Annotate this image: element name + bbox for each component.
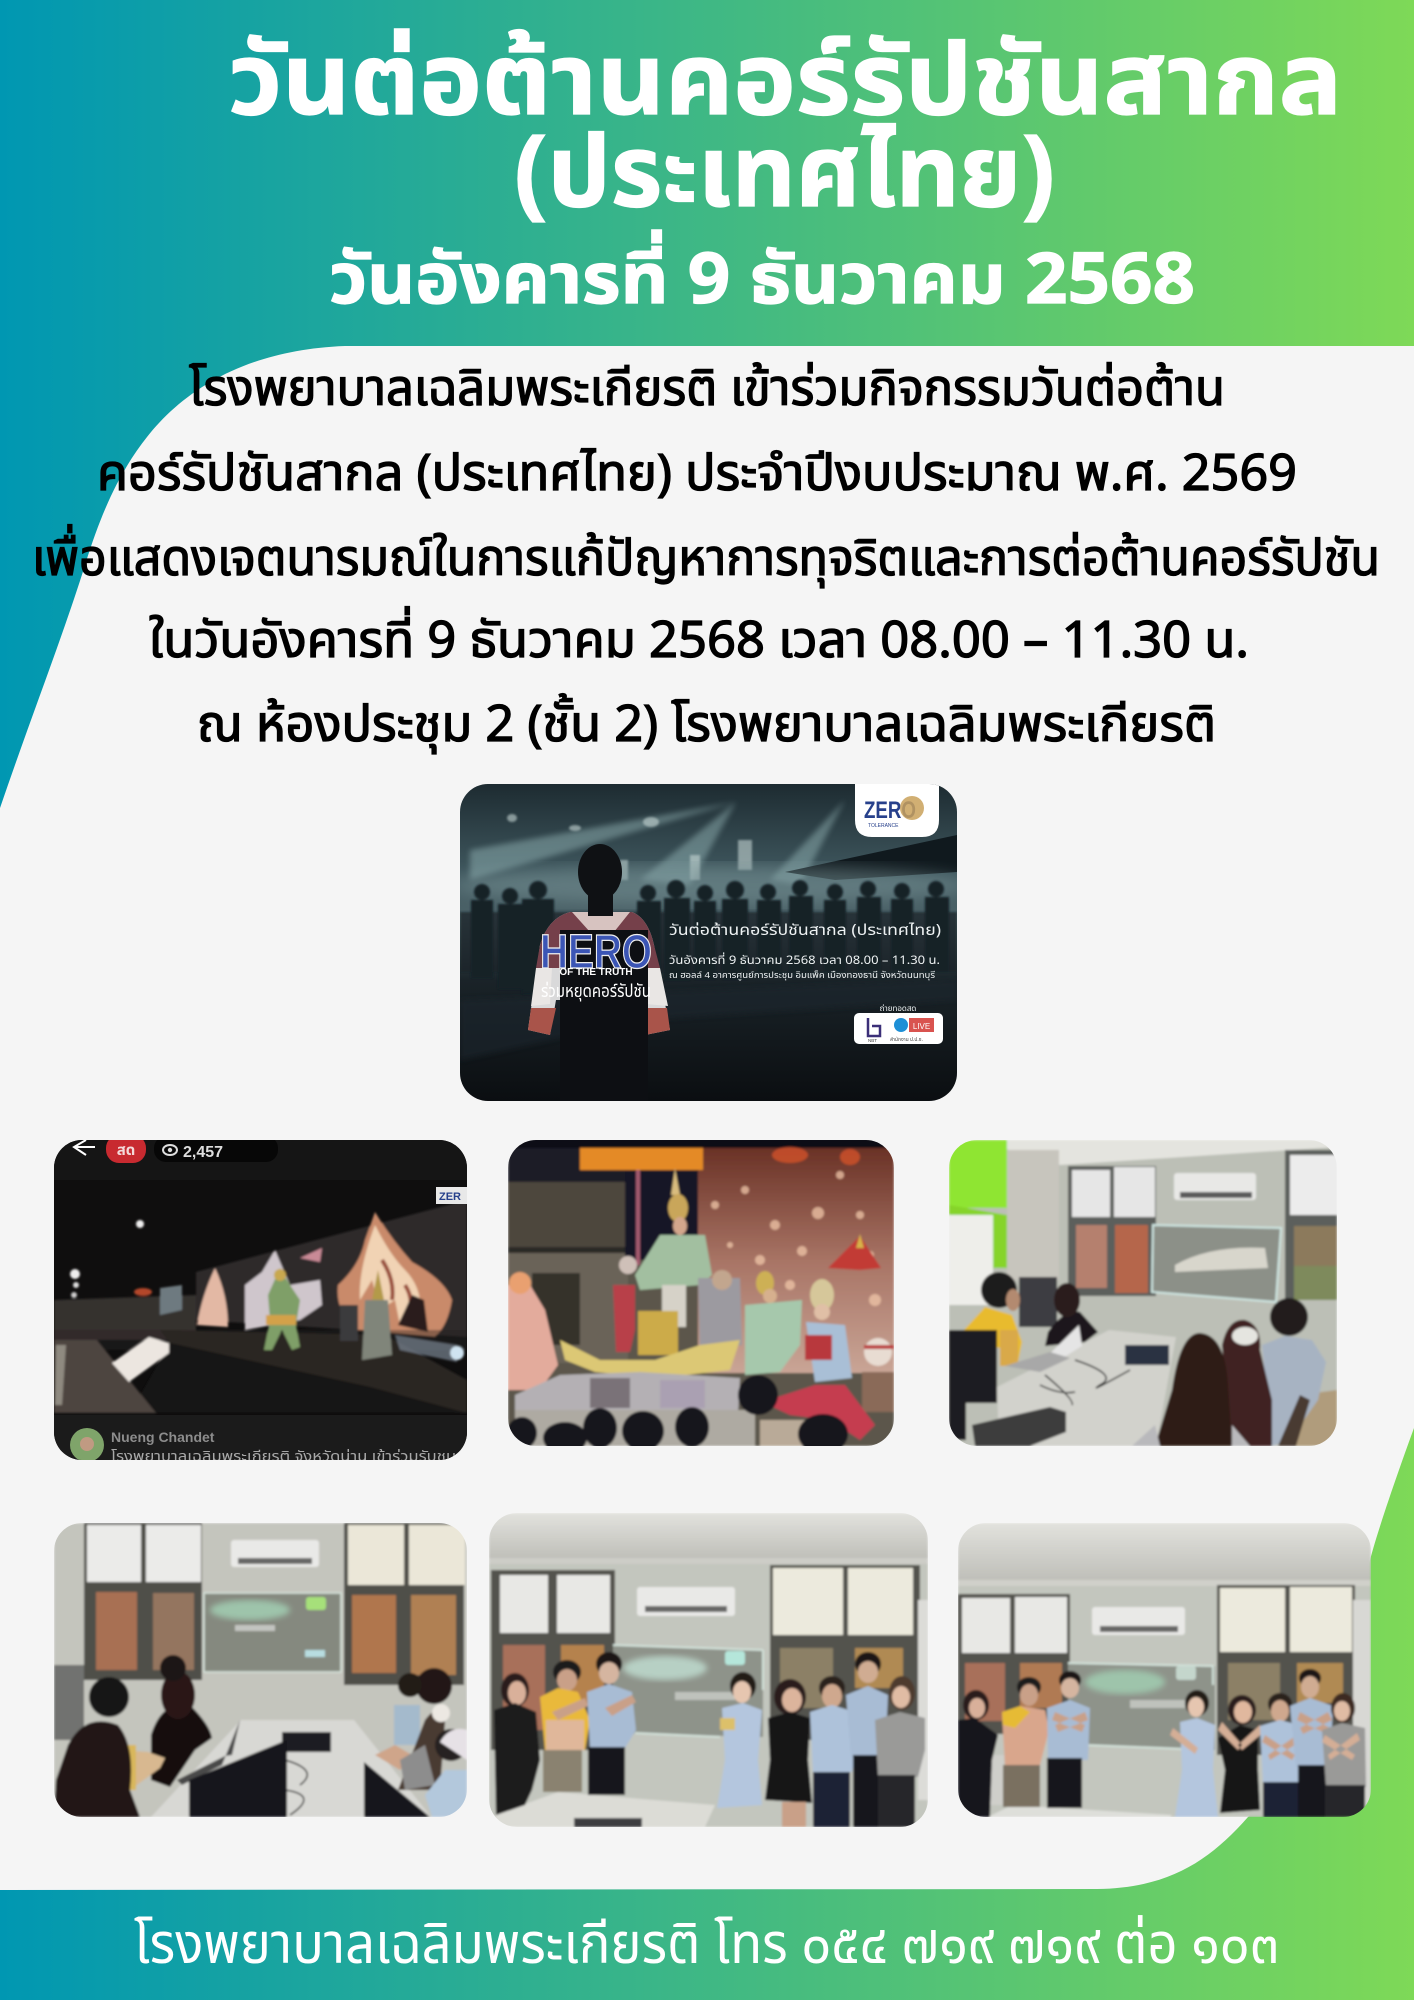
table — [151, 1720, 431, 1817]
window left — [1068, 1166, 1156, 1296]
body text block: โรงพยาบาลเฉลิมพระเกียรติ เข้าร่วมกิจกรรมวันต่อต้าน — [189, 352, 1225, 428]
hero lettering: HERO — [540, 926, 652, 979]
projector and cables — [1125, 1345, 1169, 1365]
person 3: blue shirt — [1059, 1671, 1081, 1689]
person 6: blue shirt — [1268, 1693, 1292, 1715]
fire wall art — [338, 1212, 452, 1337]
zero tolerance logo: TOLERANCE — [868, 823, 899, 829]
projection — [1068, 1663, 1215, 1750]
body text block: ในวันอังคารที่ 9 ธันวาคม 2568 เวลา 08.00 – 11.30 น. — [149, 604, 1249, 680]
title: (ประเทศไทย) — [514, 100, 1055, 251]
dancer — [264, 1268, 300, 1350]
person 7: blue shirt — [1299, 1669, 1321, 1687]
comment bar: Nueng Chandet — [111, 1429, 215, 1445]
windows — [491, 1570, 615, 1750]
poster photo: Hero of the truth — [450, 784, 970, 1101]
performers — [828, 1236, 881, 1270]
person 5: black dress — [1228, 1695, 1256, 1725]
man in yellow — [964, 1307, 1022, 1366]
footer contact bar: โรงพยาบาลเฉลิมพระเกียรติ โทร ๐๕๔ ๗๑๙ ๗๑๙ ต่อ ๑๐๓ — [134, 1905, 1279, 1989]
air conditioner — [231, 1540, 319, 1567]
projection — [613, 1645, 763, 1737]
person 3: blue shirt — [596, 1652, 622, 1676]
laptop — [177, 1720, 240, 1785]
canopy — [580, 1148, 703, 1170]
hero lettering: OF THE TRUTH — [559, 967, 633, 978]
person 8: gray check top — [889, 1676, 915, 1710]
event details: ถ่ายทอดสด — [880, 1003, 916, 1015]
event details: ณ ฮอลล์ 4 อาคารศูนย์การประชุม อิมแพ็ค เมืองทองธานี จังหวัดนนทบุรี — [669, 969, 935, 982]
monitor and power strip — [949, 1330, 997, 1403]
person 1: black — [963, 1690, 989, 1720]
projection screen — [204, 1593, 341, 1672]
hero lettering — [542, 934, 651, 1002]
event details: วันต่อต้านคอร์รัปชันสากล (ประเทศไทย) — [669, 919, 941, 942]
event details — [669, 919, 941, 1015]
person 2: yellow shirt — [1017, 1677, 1041, 1697]
event details: วันอังคารที่ 9 ธันวาคม 2568 เวลา 08.00 – 11.30 น. — [669, 952, 940, 970]
body text block: เพื่อแสดงเจตนารมณ์ในการแก้ปัญหาการทุจริตและการต่อต้านคอร์รัปชัน — [32, 522, 1380, 598]
windows — [958, 1594, 1070, 1734]
projection — [1152, 1225, 1281, 1302]
top live bar: สด — [117, 1139, 135, 1162]
person 6: blue shirt — [819, 1676, 845, 1700]
person 2: yellow shirt — [553, 1660, 581, 1684]
live broadcast badge: NBT — [868, 1038, 877, 1043]
chairs — [1019, 1277, 1041, 1327]
comment bar — [54, 1415, 467, 1460]
live broadcast badge: สำนักงาน ป.ป.ช. — [890, 1036, 923, 1044]
woman in black — [1045, 1311, 1098, 1346]
woman long dark hair — [1155, 1333, 1232, 1446]
air conditioner — [637, 1587, 735, 1616]
body text block — [32, 352, 1380, 764]
window right — [1285, 1150, 1337, 1322]
top live bar: 2,457 — [183, 1144, 223, 1161]
lights — [136, 1220, 144, 1228]
body text block: ณ ห้องประชุม 2 (ชั้น 2) โรงพยาบาลเฉลิมพระเกียรติ — [197, 688, 1216, 764]
woman with scrunchie — [1222, 1320, 1272, 1446]
footer contact bar — [0, 1890, 1414, 2000]
person 5: black dress — [774, 1679, 806, 1715]
air conditioner — [1092, 1607, 1185, 1635]
person 4: nurse dress — [730, 1672, 756, 1700]
laptop — [1051, 1324, 1084, 1357]
zero tolerance logo: ZERO — [864, 797, 916, 824]
title: วันต่อต้านคอร์รัปชันสากล — [228, 8, 1342, 159]
photo: livestream stage performance — [54, 1135, 467, 1468]
photo: group pledge with hands on chest — [489, 1513, 928, 1827]
man in blue, back turned — [1262, 1336, 1326, 1446]
table — [988, 1805, 1172, 1817]
air conditioner — [1174, 1173, 1256, 1200]
live broadcast badge — [854, 1013, 943, 1044]
people right — [416, 1668, 452, 1704]
stage scene — [54, 1200, 467, 1413]
crowd silhouettes — [460, 880, 957, 994]
person 4: nurse dress — [1185, 1690, 1209, 1716]
monitors — [189, 1740, 287, 1817]
projector — [282, 1732, 331, 1752]
table — [495, 1792, 715, 1827]
body text block: คอร์รัปชันสากล (ประเทศไทย) ประจำปีงบประมาณ พ.ศ. 2569 — [97, 437, 1297, 513]
person 8: gray check top — [1331, 1693, 1355, 1723]
person 7: blue shirt — [855, 1652, 881, 1676]
bokeh sparks — [711, 1171, 881, 1306]
top live bar: ZER — [439, 1191, 461, 1203]
live broadcast badge: LIVE — [913, 1022, 930, 1031]
audience heads — [509, 1406, 849, 1446]
photo: staff watching stream in meeting room — [949, 1140, 1337, 1446]
table — [997, 1330, 1176, 1446]
people left — [151, 1704, 212, 1787]
title: วันอังคารที่ 9 ธันวาคม 2568 — [329, 229, 1195, 335]
photo: staff watching projection, table view — [54, 1523, 467, 1817]
hero lettering: ร่วมหยุดคอร์รัปชัน — [541, 979, 651, 1006]
top live bar — [54, 1135, 467, 1204]
comment bar: โรงพยาบาลเฉลิมพระเกียรติ จังหวัดน่าน เข้าร่วมรับชม — [111, 1447, 456, 1468]
zero tolerance logo — [855, 784, 939, 837]
windows — [84, 1523, 202, 1680]
man silhouette with flag jersey — [528, 844, 670, 1048]
person 1: black suit — [501, 1673, 529, 1707]
photo: group pledge with arms crossed — [958, 1523, 1371, 1817]
title — [228, 8, 1342, 335]
performers — [362, 1300, 392, 1360]
photo: khon performance — [507, 1138, 894, 1454]
